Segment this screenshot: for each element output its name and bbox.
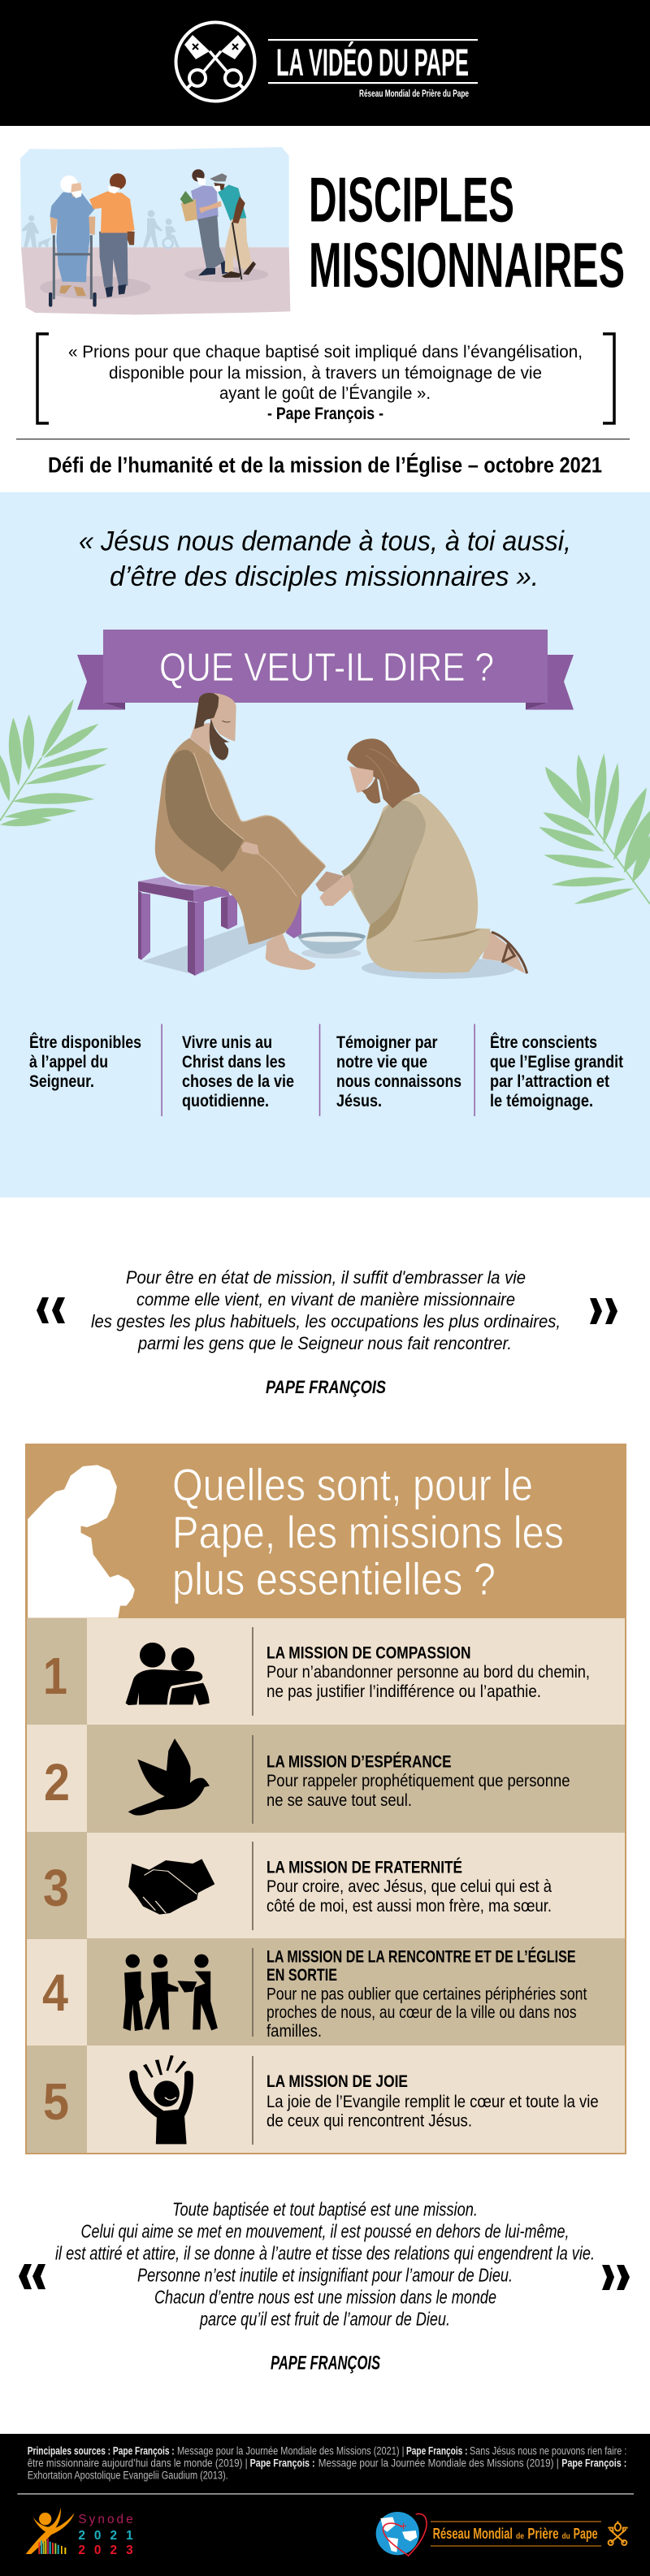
sources text: Principales sources : Pape François : <box>28 2444 175 2457</box>
mission 2: ne se sauve tout seul. <box>266 1791 412 1810</box>
mission 1: LA MISSION DE COMPASSION <box>266 1644 471 1663</box>
icon: globe and heart <box>376 2512 427 2556</box>
icon: dove <box>128 1738 210 1816</box>
logo: Réseau Mondial de Prière du Pape: Prière <box>527 2525 559 2542</box>
key point 3: Jésus. <box>336 1092 382 1110</box>
sources text: Pape François : <box>250 2457 315 2469</box>
panel heading: Quelles sont, pour le <box>172 1459 533 1510</box>
prayer intention quote: - Pape François - <box>267 404 384 423</box>
sources text: Message pour la Journée Mondiale des Missions (2021) | <box>177 2444 405 2457</box>
panel heading: Pape, les missions les <box>172 1507 564 1558</box>
sources text: Exhortation Apostolique Evangelii Gaudium (2013). <box>28 2469 228 2481</box>
pull quote 2 <box>19 2199 630 2375</box>
icon: opening guillemet <box>37 1297 65 1323</box>
icon: opening guillemet <box>19 2264 46 2289</box>
title: DISCIPLES <box>309 164 514 236</box>
seated disciple <box>155 693 344 970</box>
key point 3: nous connaissons <box>336 1072 462 1091</box>
mission 5: La joie de l’Evangile remplit le cœur et toute la vie <box>266 2093 599 2111</box>
panel heading <box>172 1459 564 1604</box>
intro quote <box>79 526 571 592</box>
title <box>309 164 625 301</box>
sources text <box>28 2444 626 2481</box>
header title: LA VIDÉO DU PAPE <box>276 41 469 84</box>
logo: Synode 2021-2023: 2021 <box>78 2529 133 2543</box>
stool and floor shadow <box>138 877 301 976</box>
header title: Réseau Mondial de Prière du Pape <box>359 88 469 99</box>
pull quote 2: parce qu’il est fruit de l’amour de Dieu. <box>199 2309 450 2330</box>
prayer intention quote: « Prions pour que chaque baptisé soit impliqué dans l’évangélisation, <box>68 342 583 362</box>
key point 2: Christ dans les <box>182 1053 286 1072</box>
panel: essential missions <box>26 1444 626 2154</box>
icon: closing guillemet <box>590 1298 618 1324</box>
intro quote: d’être des disciples missionnaires ». <box>110 561 539 592</box>
mission 4 <box>27 1938 625 2046</box>
key point 1: Seigneur. <box>29 1072 94 1091</box>
pull quote 1: PAPE FRANÇOIS <box>266 1377 386 1397</box>
Jesus head <box>347 738 420 808</box>
mission 2: Pour rappeler prophétiquement que personne <box>266 1772 570 1790</box>
key points list <box>29 1024 623 1116</box>
mission 2: 2 <box>44 1753 70 1812</box>
mission 1: ne pas justifier l’indifférence ou l’apathie. <box>266 1682 541 1701</box>
panel: what it means <box>0 492 650 1197</box>
key point 4: le témoignage. <box>490 1092 593 1110</box>
header title <box>268 39 478 99</box>
intro quote: « Jésus nous demande à tous, à toi aussi, <box>79 526 571 557</box>
pull quote 2: PAPE FRANÇOIS <box>271 2353 380 2375</box>
palm branch left <box>0 699 109 826</box>
mission 3: 3 <box>43 1859 69 1917</box>
mission 3: côté de moi, est aussi mon frère, ma sœur. <box>266 1897 552 1916</box>
key point 4: que l’Eglise grandit <box>490 1053 623 1072</box>
icon: joyful person <box>129 2055 193 2144</box>
logo: Réseau Mondial de Prière du Pape: Pape <box>574 2525 598 2542</box>
key point 1: à l’appel du <box>29 1053 108 1072</box>
mission 4: EN SORTIE <box>266 1966 337 1985</box>
mission 1: Pour n’abandonner personne au bord du chemin, <box>266 1663 590 1682</box>
mission 5 <box>27 2046 625 2153</box>
key point 1: Être disponibles <box>29 1033 141 1052</box>
logo: Synode 2021-2023: Synode <box>78 2513 133 2526</box>
pull quote 1: comme elle vient, en vivant de manière missionnaire <box>136 1289 515 1310</box>
key point 2 <box>182 1033 294 1110</box>
pull quote 1: Pour être en état de mission, il suffit d'embrasser la vie <box>126 1267 526 1288</box>
logo: Synode 2021-2023: 2023 <box>78 2544 133 2557</box>
key point 3: Témoigner par <box>336 1033 437 1052</box>
mission 3 <box>27 1832 625 1939</box>
ribbon banner: QUE VEUT-IL DIRE ? <box>159 646 494 690</box>
icon: handshake <box>128 1859 214 1915</box>
key point 3 <box>336 1033 462 1110</box>
mission 1 <box>27 1618 625 1725</box>
sources text: Pape François : <box>561 2457 626 2469</box>
icon: three people sharing <box>124 1955 218 2031</box>
pull quote 1: parmi les gens que le Seigneur nous fait rencontrer. <box>137 1333 512 1353</box>
key point 1 <box>29 1033 141 1091</box>
panel heading: plus essentielles ? <box>172 1553 496 1604</box>
pull quote 1: les gestes les plus habituels, les occupations les plus ordinaires, <box>91 1311 561 1331</box>
footer band <box>0 2434 650 2576</box>
prayer intention quote: ayant le goût de l’Évangile ». <box>219 383 431 403</box>
pull quote 2: Chacun d’entre nous est une mission dans le monde <box>154 2287 496 2308</box>
key point 2: quotidienne. <box>182 1092 269 1110</box>
kneeling Jesus <box>319 794 527 979</box>
key point 4: par l’attraction et <box>490 1072 609 1091</box>
pull quote 2: Toute baptisée et tout baptisé est une mission. <box>172 2199 478 2220</box>
mission 5: LA MISSION DE JOIE <box>266 2072 408 2091</box>
mission 1: 1 <box>43 1647 67 1705</box>
prayer intention quote: disponible pour la mission, à travers un témoignage de vie <box>109 363 542 383</box>
basin <box>298 932 366 959</box>
pull quote 1 <box>37 1267 618 1397</box>
mission 3: LA MISSION DE FRATERNITÉ <box>266 1859 462 1877</box>
illustration: helpers with elderly people <box>20 147 290 314</box>
mission 4: proches de nous, au cœur de la ville ou dans nos <box>266 2003 577 2022</box>
logo: Réseau Mondial de Prière du Pape: du <box>562 2532 570 2541</box>
mission 3: Pour croire, avec Jésus, que celui qui est à <box>266 1877 552 1896</box>
key point 4 <box>490 1033 623 1110</box>
logo: Synode 2021-2023 <box>26 2508 133 2557</box>
palm branch right <box>539 753 650 904</box>
illustration: washing of the feet <box>138 693 527 979</box>
icon: small keys <box>608 2521 628 2545</box>
key point 4: Être conscients <box>490 1033 597 1052</box>
key point 2: choses de la vie <box>182 1072 294 1091</box>
mission 5: de ceux qui rencontrent Jésus. <box>266 2112 472 2131</box>
icon: crossed keys logo <box>176 23 255 101</box>
mission 4: Pour ne pas oublier que certaines périphéries sont <box>266 1985 587 2004</box>
logo: Réseau Mondial de Prière du Pape: de <box>516 2532 524 2541</box>
icon: closing guillemet <box>602 2265 630 2290</box>
key point 2: Vivre unis au <box>182 1033 272 1052</box>
icon: praying pope silhouette <box>28 1465 135 1618</box>
ribbon banner <box>77 630 574 710</box>
logo: Réseau Mondial de Prière du Pape <box>376 2512 628 2556</box>
prayer intention quote <box>37 334 614 423</box>
logo: Réseau Mondial de Prière du Pape: Réseau Mondial <box>433 2525 513 2542</box>
key point 3: notre vie que <box>336 1053 427 1072</box>
icon: embrace <box>126 1643 210 1705</box>
header band <box>0 0 650 126</box>
sources text: être missionnaire aujourd’hui dans le monde (2019) | <box>28 2457 248 2469</box>
mission 5: 5 <box>43 2072 69 2131</box>
mission 2: LA MISSION D’ESPÉRANCE <box>266 1753 452 1772</box>
pull quote 2: Personne n’est inutile et insignifiant pour l’amour de Dieu. <box>137 2265 513 2286</box>
sources text: Pape François : <box>406 2444 468 2457</box>
mission 4: familles. <box>266 2022 322 2041</box>
sources text: Message pour la Journée Mondiale des Missions (2019) | <box>318 2457 559 2469</box>
mission 2 <box>27 1725 625 1833</box>
mission 4: 4 <box>42 1963 68 2022</box>
